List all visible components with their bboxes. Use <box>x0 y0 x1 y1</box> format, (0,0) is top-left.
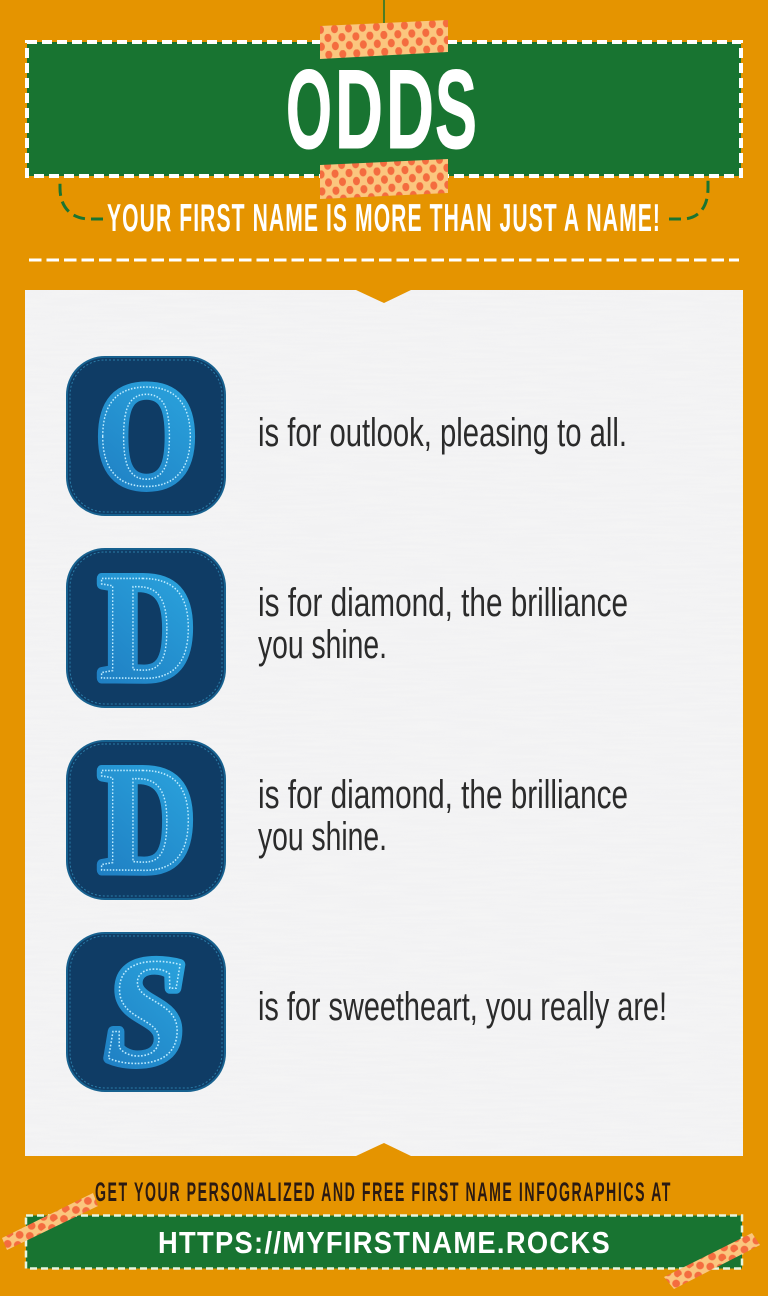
row: letter D second <box>67 734 628 903</box>
tape left <box>2 1193 98 1250</box>
row: letter O <box>67 354 627 518</box>
text block: you shine. <box>258 623 387 667</box>
icon: letter S <box>67 928 225 1096</box>
icon: letter O: O <box>96 354 197 518</box>
row: letter D <box>67 542 628 711</box>
bottom notch <box>356 1143 411 1156</box>
icon: letter S: S <box>106 928 186 1096</box>
icon: letter D: D <box>99 542 195 711</box>
icon: letter O: O <box>96 354 197 518</box>
icon: letter D: D <box>99 734 195 903</box>
text block: is for diamond, the brilliance <box>258 581 628 625</box>
icon: letter D <box>67 542 225 711</box>
icon: letter D <box>67 734 225 903</box>
tape right <box>664 1233 760 1289</box>
right bracket <box>669 178 708 219</box>
footer banner <box>2 1193 760 1289</box>
icon: letter D: D <box>99 542 195 711</box>
left bracket <box>60 178 103 219</box>
icon: letter O <box>67 354 225 518</box>
paper sheet <box>25 290 743 1156</box>
title text: D <box>335 47 383 172</box>
tape bottom <box>320 159 448 199</box>
text line: is for outlook, pleasing to all. <box>258 411 627 455</box>
hanging string <box>383 0 385 24</box>
row: letter S <box>67 928 667 1096</box>
dashed divider <box>29 258 739 262</box>
content panel <box>25 290 743 1156</box>
tape top <box>320 20 448 59</box>
top notch <box>356 290 411 303</box>
title text: O <box>286 47 332 172</box>
title text: D <box>386 47 434 172</box>
title text: S <box>435 47 477 172</box>
banner panel <box>26 1216 742 1268</box>
text block: you shine. <box>258 815 387 859</box>
title banner <box>27 20 741 199</box>
icon: letter S: S <box>106 928 186 1096</box>
url text: HTTPS://MYFIRSTNAME.ROCKS <box>158 1225 611 1260</box>
icon: letter D: D <box>99 734 195 903</box>
banner panel <box>27 42 741 176</box>
text block: is for diamond, the brilliance <box>258 773 628 817</box>
